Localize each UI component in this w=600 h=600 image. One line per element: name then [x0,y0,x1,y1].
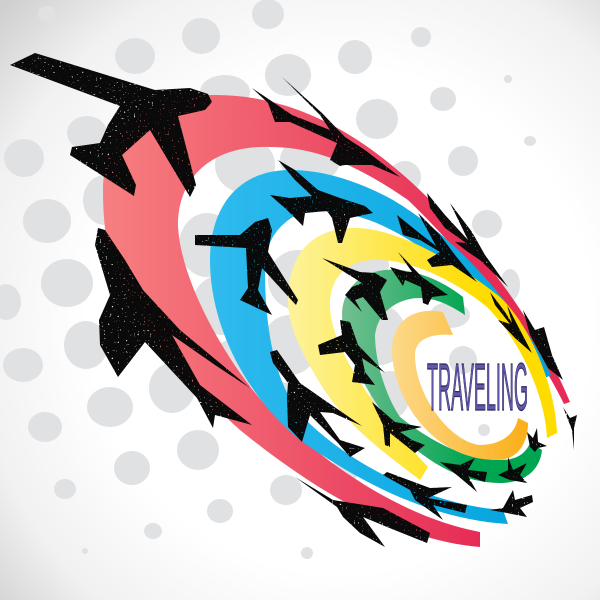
plane: small bottom right [490,490,533,517]
plane: green ring end [527,428,547,452]
plane: green ring lower left [372,402,425,453]
plane: blue ring bottom [383,472,467,520]
ring: orange [392,311,528,460]
ring: red [103,95,570,547]
ring: yellow [288,228,557,480]
plane: blue ring right [490,292,532,353]
plane: blue ring left [195,218,298,315]
plane: blue ring top [270,160,373,243]
plane: large top left [10,53,212,197]
plane: green ring top [390,252,448,305]
plane: far right small [563,407,577,450]
plane: green ring left [318,320,385,385]
plane: yellow ring inner top [322,258,388,320]
plane: red ring upper right [427,193,508,287]
ring: blue [210,170,551,524]
plane: red ring bottom [295,477,430,547]
plane: large blue ring bottom [270,350,365,457]
ring: green [342,270,542,483]
plane: large left [95,228,252,428]
plane: red ring top [252,77,400,177]
plane: green ring bottom right [498,457,527,483]
plane: green ring bottom [440,458,487,492]
plane: red ring right [523,310,563,380]
rings: coloured swirl [103,95,570,547]
plane: blue ring upper right [397,213,477,282]
airplane silhouettes [10,53,577,547]
